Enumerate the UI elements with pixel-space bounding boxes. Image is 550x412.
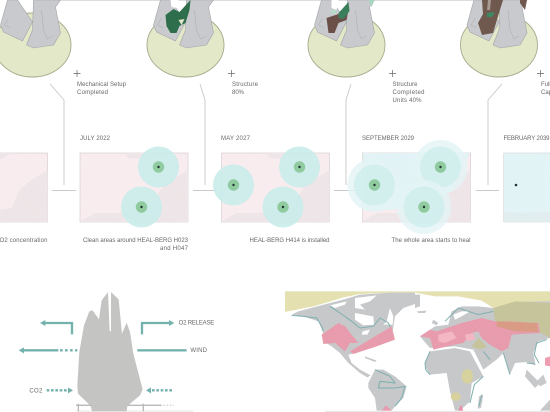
tower marker — [515, 184, 517, 186]
southeast asia — [525, 370, 540, 388]
middle east zone — [472, 338, 487, 350]
arctic and hudson water — [330, 295, 393, 335]
pollution zone west north america — [322, 323, 358, 351]
pollution zone eurasia — [420, 318, 540, 351]
australia — [540, 400, 550, 411]
O2 release label: O2 RELEASE — [179, 320, 214, 326]
eurasia and africa — [415, 291, 550, 411]
south america land — [368, 370, 407, 411]
stage 4 label — [537, 70, 550, 96]
africa hatch spots — [462, 369, 473, 384]
current lines — [292, 306, 405, 406]
clean area — [262, 186, 304, 228]
stage 3 label: Units 40% — [392, 98, 422, 104]
greenland — [390, 293, 415, 316]
eurasia land — [420, 301, 550, 375]
panel 2 caption: Clean areas around HEAL-BERG H023 — [83, 238, 189, 244]
clean area — [348, 158, 402, 212]
arctic hatch band west — [285, 291, 415, 312]
faint ground line — [77, 410, 193, 412]
base rail — [76, 404, 174, 411]
map panel 5 healed — [504, 153, 550, 222]
arctic hatch band east — [415, 291, 550, 308]
south africa zone — [458, 405, 463, 411]
clean area H023 — [138, 146, 179, 188]
panel 1 caption: O2 concentration — [0, 238, 48, 244]
panel 2 caption — [83, 238, 189, 252]
map panel 3 with three clean areas — [213, 146, 330, 228]
date: September 2029: SEPTEMBER 2029 — [362, 136, 415, 142]
stage 3 label: Structure — [392, 82, 418, 88]
clean area — [279, 146, 320, 188]
pollution zone south america — [382, 405, 392, 411]
world map — [285, 291, 550, 412]
stage 1 label: Completed — [77, 90, 108, 96]
date: May 2027: MAY 2027 — [221, 136, 251, 142]
stage 4 model: full capacity — [460, 0, 538, 77]
stage 2 label — [228, 70, 259, 96]
current lines — [425, 308, 547, 406]
pollution zone east north america — [350, 326, 395, 354]
CO2 arrow left — [47, 387, 68, 394]
scandinavian sea — [453, 311, 470, 320]
clean area — [397, 180, 451, 234]
stage 2 model: structure 80% — [147, 0, 224, 77]
O2 release arrow right — [142, 323, 169, 334]
west europe islands — [415, 295, 438, 325]
clean area — [213, 164, 254, 206]
stage 2 label: Structure — [232, 82, 259, 88]
wind line in — [137, 349, 187, 351]
stage 1 label — [74, 70, 127, 96]
philippines zone — [545, 356, 550, 366]
O2 release arrow left — [45, 323, 72, 334]
panel 2 caption: and H047 — [160, 246, 189, 252]
clean area H047 — [121, 186, 162, 228]
top edge strip — [60, 0, 500, 1]
airflow diagram — [19, 292, 214, 412]
caribbean islands — [365, 356, 377, 362]
north america land — [292, 293, 395, 377]
africa land — [425, 348, 483, 411]
madagascar — [478, 395, 483, 409]
wind label: WIND — [190, 348, 208, 354]
stage 1 label: Mechanical Setup — [77, 82, 127, 88]
tower silhouette — [77, 292, 143, 411]
wind arrow out — [23, 347, 77, 354]
CO2 arrow right — [151, 387, 172, 394]
stage 2 label: 80% — [232, 90, 245, 96]
map panel 1 — [0, 153, 48, 222]
date: February 2039: FEBRUARY 2039 — [504, 136, 550, 142]
americas — [285, 291, 415, 411]
stage 3 label: Completed — [392, 90, 424, 96]
stage 3 label — [389, 70, 424, 104]
CO2 label: CO2 — [29, 389, 43, 395]
panel 4 caption: The whole area starts to heal — [392, 238, 470, 244]
map panel 4 healing — [348, 140, 471, 234]
panel 3 caption: HEAL-BERG H414 is installed — [250, 238, 330, 244]
clean area — [414, 140, 468, 194]
map panel 2 with clean areas — [80, 146, 188, 228]
date: July 2022: JULY 2022 — [80, 136, 111, 142]
map bottom edge — [325, 411, 550, 412]
stage 3 model: structure completed — [308, 0, 385, 77]
connector lines — [50, 84, 502, 190]
central asia overlap — [497, 321, 538, 332]
stage 1 model: mechanical setup — [0, 0, 71, 77]
siberian zone — [493, 301, 550, 338]
mediterranean patch — [438, 331, 457, 343]
